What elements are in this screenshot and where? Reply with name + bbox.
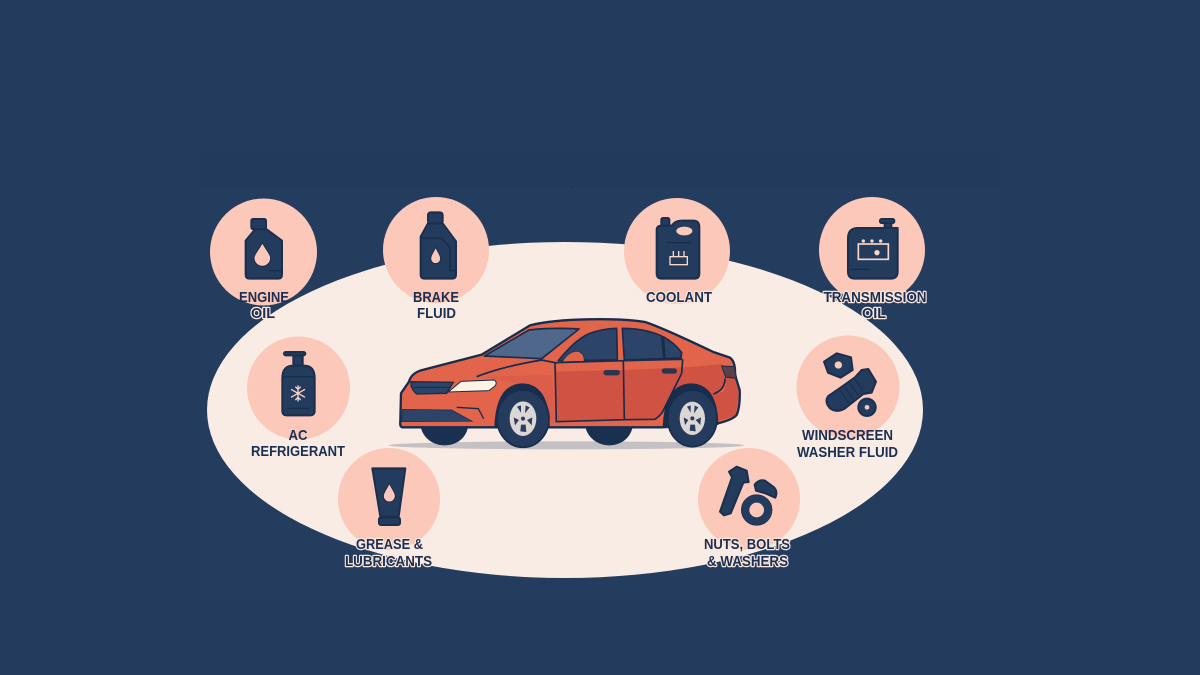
item: grease and lubricants [338,448,440,570]
panel: central cream ellipse [207,242,923,578]
door handles [603,370,620,375]
item: engine oil [210,198,317,322]
label: COOLANT [646,289,712,306]
label: FLUID [417,305,456,322]
item: nuts, bolts and washers [698,448,800,570]
icon: grease tube [372,468,405,525]
front wheel [494,383,550,427]
headlight [448,380,496,392]
label: BRAKE [413,289,459,306]
label: ENGINE [239,289,289,306]
icon: oil bottle [246,219,282,279]
item: transmission oil [819,197,926,322]
item: coolant [624,198,730,306]
item: brake fluid [383,197,489,322]
label [413,289,459,322]
label [251,427,345,460]
label: REFRIGERANT [251,443,345,460]
label: OIL [251,305,275,322]
label [824,289,926,322]
icon: pump bottle with snowflake [282,352,315,415]
label: NUTS, BOLTS [704,536,790,553]
label: TRANSMISSION [824,289,926,306]
icon: transmission oil can [848,219,898,279]
windows [558,328,617,361]
label [704,536,790,570]
label: GREASE & [356,536,423,553]
label: & WASHERS [707,553,788,570]
label: LUBRICANTS [345,553,432,570]
item: AC refrigerant [247,336,350,460]
tail lamp [722,366,737,378]
label [345,536,432,570]
grille [411,382,453,394]
rear wheel [663,383,718,427]
label: WINDSCREEN [802,427,893,444]
icon: car [389,319,744,449]
label: OIL [862,305,886,322]
label: AC [288,427,308,444]
icon: brake fluid bottle [421,212,456,279]
windshield [484,328,579,359]
label: WASHER FLUID [797,444,898,461]
intake [402,409,472,422]
icon: coolant jerry can [657,218,699,279]
icon: bolt, nut and washer [720,467,776,525]
label [797,427,898,461]
item: windscreen washer fluid [796,336,900,461]
icon: nut, bolt and washer [824,353,876,416]
label [239,289,289,322]
